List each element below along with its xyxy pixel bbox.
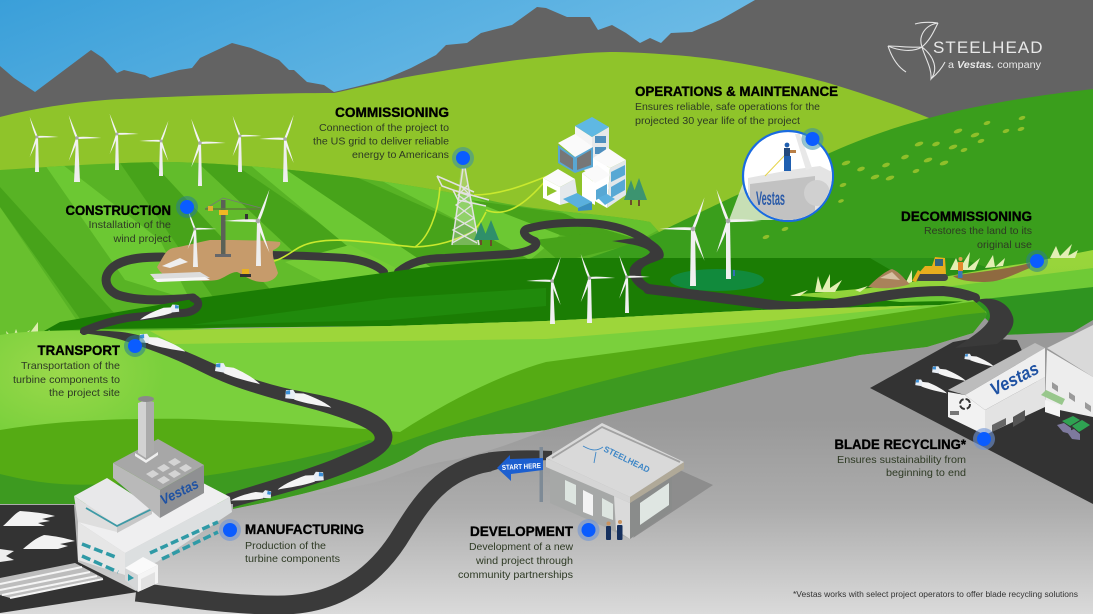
lighter strip in dark band	[190, 288, 546, 325]
label: blade recycling	[834, 436, 967, 479]
footnote: *Vestas works with select project operators to offer blade recycling solutions	[793, 589, 1078, 599]
crane	[205, 198, 261, 257]
recycling building	[948, 325, 1093, 435]
dot: decommissioning	[1026, 250, 1048, 272]
recycling lot	[870, 338, 1093, 504]
factory chimney	[135, 396, 158, 463]
trees by buildings	[624, 178, 647, 206]
office buildings	[543, 117, 626, 211]
dark green band	[44, 258, 987, 331]
label: construction: Installation of the	[88, 219, 171, 231]
recycling brand: Vestas	[987, 358, 1042, 400]
label: decommissioning: original use	[977, 239, 1032, 251]
trucks in recycling lot	[915, 353, 996, 394]
grey ground	[0, 318, 1093, 614]
grass tufts	[790, 244, 1078, 296]
recycling symbol	[960, 399, 970, 409]
logo mark	[888, 22, 945, 79]
label: decommissioning: DECOMMISSIONING	[901, 208, 1032, 224]
trees by pylon	[474, 220, 499, 246]
earth mound and path	[868, 263, 1030, 288]
striped field	[0, 162, 659, 335]
label: commissioning: the US grid to deliver reliable	[313, 136, 449, 148]
label: transport: turbine components to	[13, 374, 120, 386]
road: transport route from factory	[80, 331, 392, 508]
road: to factory	[136, 450, 552, 605]
stored blades	[0, 511, 103, 598]
right hill	[560, 89, 1093, 300]
dot: manufacturing	[219, 519, 241, 541]
lime slope lower band	[860, 268, 1093, 302]
dot: blade recycling	[973, 428, 995, 450]
label: operations and maintenance: Ensures reliable, safe operations for the	[635, 101, 820, 113]
label: development: community partnerships	[458, 569, 573, 581]
two people shaking hands	[606, 520, 622, 540]
roof logo: STEELHEAD	[602, 444, 651, 475]
road: hairpin and strand across lime slope	[612, 238, 975, 307]
label: development: wind project through	[475, 555, 573, 567]
dirt construction pad	[157, 240, 280, 282]
back row of wind turbines	[29, 113, 295, 186]
front wind turbines	[659, 189, 762, 286]
label: construction	[66, 202, 171, 245]
label: transport: the project site	[49, 387, 120, 399]
factory brand: Vestas	[157, 475, 201, 508]
sign post with start here arrow	[497, 447, 543, 502]
factory	[74, 396, 232, 592]
label: commissioning	[313, 104, 449, 161]
green waste trucks	[1057, 416, 1090, 440]
label: development: Development of a new	[469, 541, 573, 553]
trucks with blades	[138, 303, 333, 501]
label: transport: Transportation of the	[21, 360, 120, 372]
road: hairpin to transport bend	[84, 298, 198, 331]
dot: transport	[124, 335, 146, 357]
label: construction: wind project	[112, 233, 171, 245]
tagline: a Vestas. company	[948, 60, 1041, 71]
label: commissioning: COMMISSIONING	[335, 104, 449, 120]
road: into recycling lot	[955, 299, 1014, 348]
construction materials	[150, 258, 210, 282]
logo	[888, 22, 1042, 79]
label: development	[458, 523, 573, 581]
fading hill shadow	[870, 258, 1000, 290]
label: transport: TRANSPORT	[38, 342, 120, 358]
label: blade recycling: beginning to end	[886, 467, 966, 479]
magnifier: nacelle inspection	[743, 131, 840, 225]
power cables	[261, 175, 550, 263]
label: blade recycling: Ensures sustainability from	[837, 454, 966, 466]
pylon	[437, 168, 489, 245]
label: development: DEVELOPMENT	[470, 523, 573, 539]
grass at left	[6, 322, 62, 340]
label: transport	[13, 342, 120, 399]
lower field	[0, 295, 1000, 520]
lime decommissioning slope	[790, 250, 1093, 302]
mountains	[0, 0, 1093, 140]
label: commissioning: energy to Americans	[352, 149, 449, 161]
dot: commissioning	[452, 147, 474, 169]
small excavator	[240, 269, 251, 277]
construction wind turbines	[187, 189, 271, 267]
hill dots	[762, 115, 1026, 240]
worker on nacelle	[784, 143, 796, 171]
magnifier: nacelle inspection: Vestas	[756, 189, 785, 210]
worker	[958, 257, 963, 278]
label: operations and maintenance	[635, 83, 838, 127]
front wind turbines pad	[670, 269, 764, 291]
factory tower	[113, 439, 204, 518]
label: manufacturing	[245, 521, 364, 565]
label: commissioning: Connection of the project to	[319, 122, 449, 134]
label: decommissioning: Restores the land to its	[924, 225, 1032, 237]
label: manufacturing: Production of the	[245, 540, 326, 552]
dot: operations	[802, 128, 824, 150]
bulldozer	[912, 257, 948, 282]
sign post with start here arrow: START HERE	[502, 461, 541, 472]
wordmark: STEELHEAD	[933, 38, 1042, 57]
label: manufacturing: MANUFACTURING	[245, 521, 364, 537]
dot: construction	[176, 196, 198, 218]
sky	[0, 0, 1093, 130]
back hill	[0, 52, 929, 260]
label: operations and maintenance: projected 30 year life of the project	[635, 115, 800, 127]
label: operations and maintenance: OPERATIONS & MAINTENANCE	[635, 83, 838, 99]
label: decommissioning	[901, 208, 1032, 251]
magnifier cone	[729, 183, 787, 220]
label: construction: CONSTRUCTION	[66, 202, 171, 218]
road: upper loop and ridge	[106, 223, 648, 300]
label: blade recycling: BLADE RECYCLING*	[834, 436, 967, 452]
Steelhead office	[546, 423, 713, 539]
label: manufacturing: turbine components	[245, 553, 340, 565]
blade storage lot	[0, 505, 138, 613]
middle wind turbines	[526, 254, 650, 324]
dot: development	[578, 519, 600, 541]
lower right hill	[975, 287, 1093, 337]
